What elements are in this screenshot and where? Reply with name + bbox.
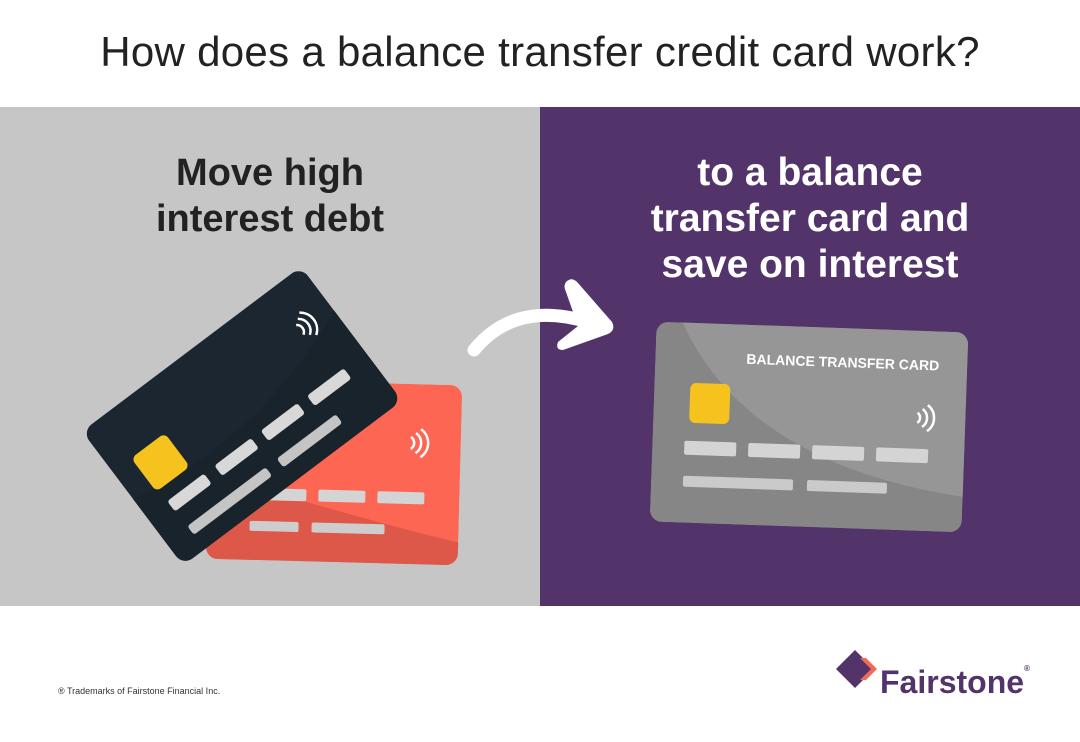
heading: right: save on interest [662,243,958,286]
panel: right purple [540,107,1080,606]
heading: left [156,152,384,240]
panel: left gray [0,107,540,606]
heading: right: transfer card and [651,197,969,240]
red card [206,384,462,565]
title: How does a balance transfer credit card work? [100,28,980,75]
logo icon [836,650,877,688]
heading: right: to a balance [697,151,923,194]
footnote: ® Trademarks of Fairstone Financial Inc. [58,686,220,696]
heading: left: Move high [176,152,364,194]
logo text: Fairstone® [880,664,1030,700]
illustration: cards and arrow [86,271,968,688]
arrow [474,279,613,350]
heading: right [651,151,969,286]
balance transfer card: BALANCE TRANSFER CARD [746,351,940,374]
dark card [86,271,398,561]
heading: left: interest debt [156,198,384,240]
balance transfer card [650,312,973,533]
